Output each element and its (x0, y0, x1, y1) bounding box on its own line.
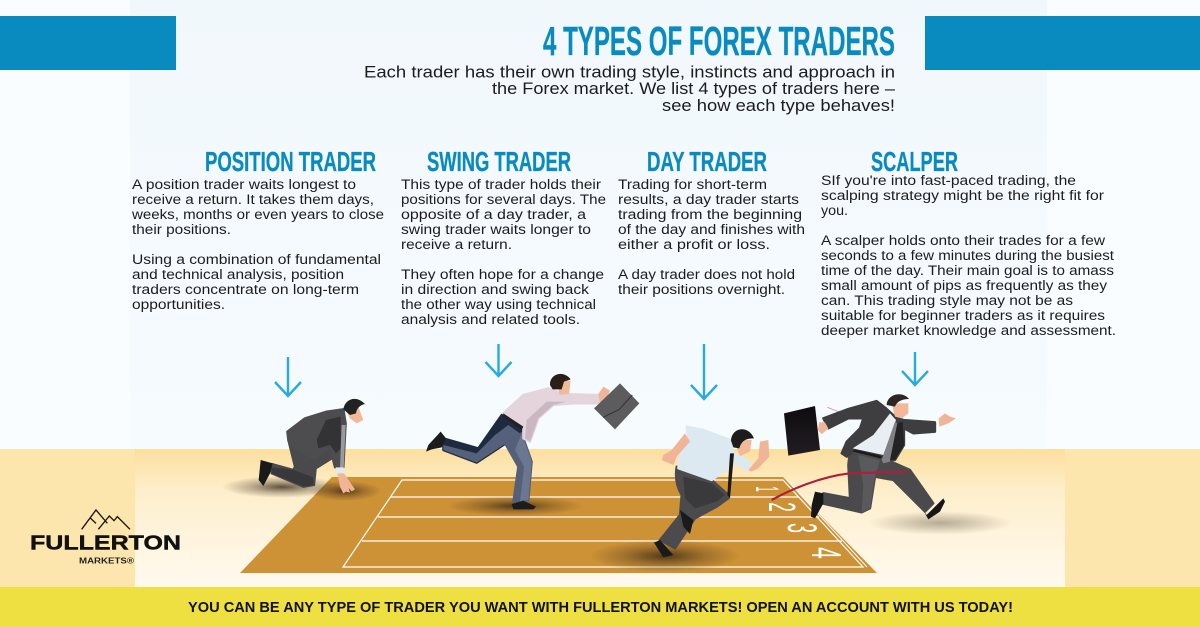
lane numbers: 1 (748, 486, 783, 492)
text: scalper description: seconds to a few minutes during the busiest (821, 248, 1114, 264)
text: scalper description: you. (821, 203, 848, 219)
header bar right (925, 16, 1200, 70)
arrow: scalper (902, 352, 928, 385)
wordmark: FULLERTON (30, 532, 181, 554)
text: swing trader description: the other way using technical (401, 297, 596, 313)
text: position trader description: receive a return. It takes them days, (132, 192, 374, 208)
text: day trader description: A day trader does not hold (618, 267, 795, 283)
running track (240, 477, 877, 573)
text: position trader description: Using a combination of fundamental (132, 252, 381, 268)
text: scalper description: scalping strategy might be the right fit for (821, 188, 1104, 204)
text: position trader description: weeks, months or even years to close (131, 207, 384, 223)
arrow: day trader (691, 344, 717, 399)
arrow: position trader (275, 357, 301, 396)
logo: Fullerton Markets (30, 510, 181, 566)
heading: scalper: SCALPER (871, 146, 958, 177)
column: day trader (618, 146, 805, 298)
text: scalper description: can. This trading style may not be as (821, 293, 1073, 309)
text: swing trader description: This type of trader holds their (401, 177, 601, 193)
figure: kneeling position trader (259, 399, 365, 493)
lane numbers: 3 (779, 523, 826, 533)
icon: mountains (82, 510, 130, 529)
figure: day trader sprinting (654, 427, 769, 557)
text: scalper description: SIf you're into fast-paced trading, the (821, 173, 1076, 189)
sub wordmark: MARKETS® (79, 556, 134, 566)
text: scalper description: A scalper holds onto their trades for a few (821, 233, 1106, 249)
heading: swing trader: SWING TRADER (427, 146, 571, 177)
shadows under figures (222, 476, 1012, 572)
text: scalper description: suitable for beginner traders as it requires (821, 308, 1105, 324)
column: position trader (131, 146, 384, 313)
text: day trader description: trading from the beginning (618, 207, 802, 223)
lane numbers: 4 (802, 547, 849, 559)
text: day trader description: their positions overnight. (618, 282, 785, 298)
call to action band (0, 587, 1200, 627)
text: scalper description: deeper market knowledge and assessment. (821, 323, 1116, 339)
figure: swing trader with briefcase (426, 374, 639, 509)
text: swing trader description: opposite of a day trader, a (401, 207, 586, 223)
lane numbers (748, 486, 849, 559)
intro text: the Forex market. We list 4 types of traders here – (492, 79, 896, 98)
heading: day trader: DAY TRADER (647, 146, 767, 177)
text: swing trader description: in direction and swing back (401, 282, 590, 298)
text: position trader description: their positions. (132, 222, 231, 238)
text: day trader description: of the day and finishes with (618, 222, 805, 238)
header bar left (0, 16, 176, 70)
text: scalper description: time of the day. Their main goal is to amass (821, 263, 1114, 279)
text: scalper description: small amount of pips as frequently as they (821, 278, 1108, 294)
text: position trader description: opportunities. (132, 297, 225, 313)
text: position trader description (131, 177, 384, 313)
text: position trader description: and technical analysis, position (132, 267, 344, 283)
column: scalper (821, 146, 1116, 339)
intro text (364, 62, 896, 115)
intro text: Each trader has their own trading style, instincts and approach in (364, 62, 895, 82)
text: day trader description: either a profit or loss. (618, 237, 770, 253)
text: swing trader description: positions for several days. The (401, 192, 606, 208)
text: scalper description (821, 173, 1116, 339)
text: swing trader description: They often hope for a change (401, 267, 604, 283)
text: swing trader description: swing trader waits longer to (401, 222, 591, 238)
call to action text: YOU CAN BE ANY TYPE OF TRADER YOU WANT WITH FULLERTON MARKETS! OPEN AN ACCOUNT WITH US TODAY! (188, 599, 1013, 616)
heading: position trader: POSITION TRADER (205, 146, 376, 177)
text: day trader description: results, a day trader starts (618, 192, 799, 208)
figure: scalper crossing the finish (772, 394, 956, 519)
lane numbers: 2 (760, 502, 803, 512)
text: swing trader description (401, 177, 606, 328)
text: position trader description: A position trader waits longest to (132, 177, 356, 193)
text: position trader description: traders concentrate on long-term (132, 282, 359, 298)
text: day trader description (618, 177, 805, 298)
intro text: see how each type behaves! (662, 96, 895, 115)
column: swing trader (401, 146, 606, 328)
text: swing trader description: receive a return. (401, 237, 512, 253)
arrow: swing trader (486, 344, 512, 376)
text: day trader description: Trading for short-term (618, 177, 767, 193)
text: swing trader description: analysis and related tools. (401, 312, 580, 328)
title: 4 TYPES OF FOREX TRADERS (543, 18, 895, 64)
